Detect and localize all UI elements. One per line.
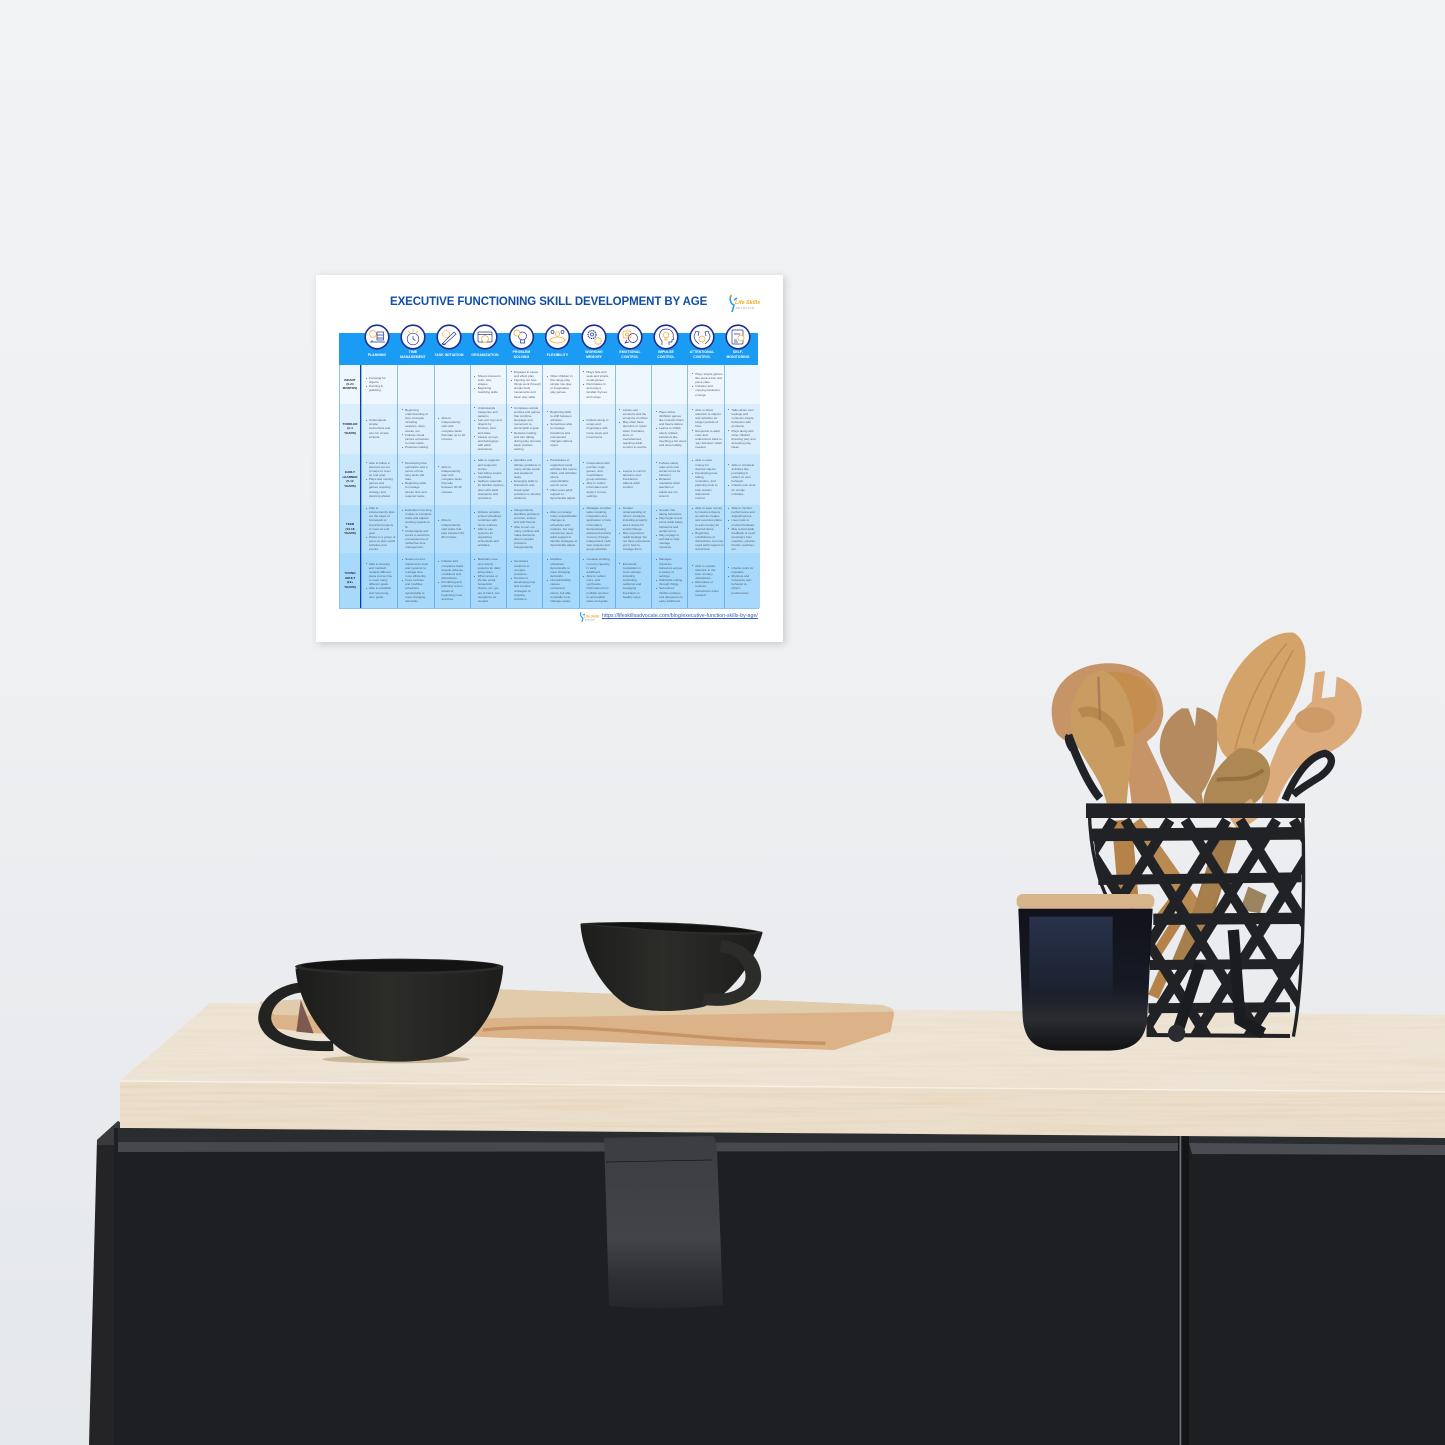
early learner time management: Developing time estimation and a sense of how long tasks will take. bbox=[405, 461, 428, 481]
early learner impulse control: Follows safety rules and most social norms for behavior. bbox=[659, 461, 681, 477]
teen impulse control: May begin to test some adult safety behaviors and social norms. bbox=[659, 516, 683, 533]
poster bbox=[316, 275, 783, 642]
early learner attentional control bbox=[687, 454, 724, 505]
teen impulse control: Greater risk taking behaviors. bbox=[659, 508, 682, 516]
toddler emotional control bbox=[615, 404, 651, 454]
toddler impulse control: Learns to inhibit safety related behaviors like touching a hot stove and street safety. bbox=[659, 426, 686, 447]
column heading: organization: ORGANIZATION bbox=[471, 352, 499, 356]
early learner self monitoring: Able to complete activities like journaling to reflect on own behavior. bbox=[732, 463, 754, 483]
teen problem solving: Independently identifies problems at home, school, and with friends. bbox=[514, 508, 539, 524]
teen attentional control bbox=[687, 505, 724, 552]
young adult working memory bbox=[579, 552, 615, 608]
young adult emotional control bbox=[615, 552, 651, 608]
teen problem solving: Able to sort out many conflicts and make decisions about complex problems independently. bbox=[514, 525, 539, 549]
row label: teen: (13-18 bbox=[346, 527, 354, 531]
toddler impulse control: Plays active inhibition games like musical chairs and freeze dance. bbox=[659, 410, 684, 426]
row label: early learner: LEARNER bbox=[343, 475, 357, 479]
skill icons row bbox=[364, 324, 751, 350]
row label: young adult: (19+ bbox=[347, 580, 353, 584]
young adult task initiation: Prioritizing and planning occurs ahead of beginning most activities. bbox=[441, 580, 463, 601]
footer logo: ADVOCATE bbox=[585, 618, 596, 622]
toddler task initiation: Able to independently start and complete tasks that take up to 10 minutes. bbox=[441, 416, 465, 441]
row label: toddler: (2-4 bbox=[347, 426, 353, 430]
toddler working memory bbox=[579, 404, 615, 454]
young adult planning bbox=[361, 552, 397, 608]
teen organization bbox=[470, 505, 506, 552]
young adult planning: Able to establish and meet long-term goals. bbox=[369, 586, 391, 599]
teen time management: Understands and works to avoid the consequences of ineffective time management. bbox=[405, 529, 430, 549]
column heading: time management bbox=[400, 350, 426, 359]
column heading: problem solving: PROBLEM bbox=[513, 350, 530, 354]
column heading: emotional control: EMOTIONAL bbox=[619, 350, 641, 354]
infant problem solving bbox=[506, 365, 542, 404]
early learner problem solving bbox=[506, 454, 542, 505]
teen problem solving bbox=[506, 505, 542, 552]
young adult time management: Uses routines and modifies schedules dynamically to meet changing demands. bbox=[405, 578, 425, 603]
icon: impulse control bbox=[654, 325, 678, 349]
column heading: impulse control bbox=[657, 350, 675, 359]
infant problem solving: Engages in cause and effect play. bbox=[514, 370, 538, 378]
row label: teen bbox=[339, 505, 361, 552]
toddler problem solving bbox=[506, 404, 542, 454]
row label: early learner: (5-12 bbox=[346, 479, 354, 483]
early learner organization: Able to organize and sequence stories. bbox=[478, 458, 500, 471]
infant working memory: Participates in and enjoys familiar rhymes and songs. bbox=[586, 382, 607, 399]
right black cup bbox=[580, 922, 763, 1011]
young adult impulse control: Withholds cutting through things. bbox=[659, 578, 682, 586]
toddler time management: Follows visual picture schedules to order tasks. bbox=[405, 433, 429, 445]
row label: infant: INFANT bbox=[344, 378, 356, 382]
young adult time management bbox=[397, 552, 434, 608]
young adult emotional control: Emotional modulation in most settings, including controlling outbursts and managing frustration in healthy ways. bbox=[623, 562, 642, 599]
teen working memory: Manages complex tasks requiring integration and application of new information, demonstrating advanced working memory through independent multi step projects and group activities. bbox=[586, 506, 611, 551]
toddler organization: Can sort toys and objects by function, form, and class. bbox=[478, 418, 502, 435]
icon: self monitoring bbox=[726, 325, 750, 349]
column heading: attentional control: ATTENTIONAL bbox=[690, 350, 714, 354]
young adult impulse control bbox=[651, 552, 687, 608]
teen attentional control: Beginning mindfulness of distractions, but may need adult support to avoid them. bbox=[695, 531, 724, 551]
young adult task initiation bbox=[434, 552, 470, 608]
teen attentional control: Able to save money for desired objects as well as creates and executes plans to earn money for desired items. bbox=[695, 506, 722, 531]
toddler planning bbox=[361, 404, 397, 454]
teen time management bbox=[397, 505, 434, 552]
left black cup bbox=[265, 959, 503, 1063]
toddler planning: Understands simple instructions and can run simple errands. bbox=[369, 418, 390, 439]
early learner attentional control: Able to save money for desired objects. bbox=[695, 458, 717, 471]
young adult time management: Seeks out and implements tools and systems to manage time more efficiently. bbox=[405, 557, 428, 578]
toddler problem solving: Decision making and turn taking during play promote basic problem solving. bbox=[514, 431, 541, 451]
young adult organization: Maintains neat and orderly systems for daily living tasks. bbox=[478, 557, 500, 574]
early learner emotional control: Learns to control tantrums and frustrations without adult comfort. bbox=[623, 469, 645, 489]
column heading: flexibility: FLEXIBILITY bbox=[547, 352, 568, 356]
row label: teen: TEEN bbox=[346, 522, 354, 526]
young adult organization bbox=[470, 552, 506, 608]
infant organization: Beginning matching skills. bbox=[478, 386, 498, 394]
row label: early learner: YEARS) bbox=[344, 484, 356, 488]
cabinet bbox=[89, 1121, 1445, 1445]
toddler time management: Beginning understanding of time concepts including seasons, days, weeks, etc. bbox=[405, 408, 428, 432]
young adult flexibility bbox=[542, 552, 579, 608]
teen flexibility: Able to manage many unpredictable changes to schedules and routines, but may sometimes need adult support to identify strategies to dynamically adjust. bbox=[550, 510, 577, 547]
young adult planning: Able to develop and maintain multiple different plans at one time to meet many different goals. bbox=[369, 562, 392, 586]
teen planning bbox=[361, 505, 397, 552]
column heading: self monitoring: SELF- bbox=[733, 350, 743, 354]
early learner flexibility bbox=[542, 454, 579, 505]
early learner organization: Gathers materials for familiar routines, often with adult assistance and reminders. bbox=[478, 479, 504, 500]
row label: toddler: TODDLER bbox=[343, 422, 357, 426]
column heading: problem solving: SOLVING bbox=[514, 355, 529, 359]
toddler working memory: Follows along to songs and fingerplays with many steps and movements. bbox=[586, 418, 609, 439]
infant working memory: Plays hide and seek and simple recall games. bbox=[586, 370, 609, 382]
early learner time management: Beginning skills to manage leisure time and required tasks. bbox=[405, 481, 427, 498]
toddler emotional control: May often have tantrums or upset when frustrated, tired, or overwhelmed, requiring adult comfort to soothe. bbox=[623, 420, 647, 449]
column heading: time management: TIME bbox=[409, 350, 417, 354]
woven black basket bbox=[1016, 734, 1336, 1051]
column heading: emotional control: CONTROL bbox=[621, 355, 639, 359]
young adult task initiation: Initiates and completes tasks despite adverse conditions and distractions. bbox=[441, 559, 463, 580]
toddler flexibility: Beginning skills to shift between activities. bbox=[550, 410, 572, 422]
toddler organization: Understands categories and patterns. bbox=[478, 406, 498, 418]
icon: task initiation bbox=[437, 325, 461, 349]
teen self monitoring bbox=[724, 505, 760, 552]
footer logo bbox=[580, 612, 600, 622]
dark glass jar with cork lid bbox=[1017, 894, 1154, 1051]
young adult impulse control: Manages impulsive behaviors across a variety of settings. bbox=[659, 557, 682, 578]
young adult self monitoring: Monitors and compares own behavior to others' performance. bbox=[732, 574, 751, 595]
row label: toddler bbox=[339, 404, 361, 454]
young adult problem solving: Generates solutions to complex problems. bbox=[514, 559, 529, 576]
young adult organization: When areas of life like email, household chores, etc. get out of hand, can reorganize as needed. bbox=[478, 574, 500, 603]
row label: early learner bbox=[339, 454, 361, 505]
row label: infant: (0-24 bbox=[346, 382, 354, 386]
row label: early learner: EARLY bbox=[345, 470, 355, 474]
footer link: https://lifeskillsadvocate.com/blog/executive-function-skills-by-age/ bbox=[602, 613, 758, 619]
teen task initiation bbox=[434, 505, 470, 552]
young adult impulse control: Sometimes inhibits reckless and dangerous in early adulthood. bbox=[659, 586, 683, 603]
early learner attentional control: Developing note taking, reminders, and planning tools to help sustain attentional control. bbox=[695, 471, 717, 500]
logo: Life Skills Advocate: ADVOCATE bbox=[736, 306, 754, 310]
toddler organization bbox=[470, 404, 506, 454]
early learner working memory: Independent with puzzles, logic games, and coordinated group activities. bbox=[586, 461, 610, 481]
column heading: attentional control: CONTROL bbox=[693, 355, 711, 359]
row label: teen: YEARS) bbox=[344, 531, 356, 535]
early learner organization: Can follow simple checklists. bbox=[478, 471, 502, 479]
infant planning bbox=[361, 365, 397, 404]
toddler emotional control: Labels own emotions and the emotions of others. bbox=[623, 408, 649, 420]
early learner emotional control bbox=[615, 454, 651, 505]
teen working memory bbox=[579, 505, 615, 552]
teen organization: Able to use systems for organizing schoolwork and activities. bbox=[478, 527, 499, 547]
young adult self monitoring bbox=[724, 552, 760, 608]
early learner planning bbox=[361, 454, 397, 505]
teen flexibility bbox=[542, 505, 579, 552]
row label: young adult: YOUNG bbox=[344, 571, 356, 575]
early learner problem solving: Identifies and defines problems to many simple social and academic tasks. bbox=[514, 458, 541, 479]
infant flexibility bbox=[542, 365, 579, 404]
young adult flexibility: Unpredictability causes occasional stress, but able to handle most changes easily. bbox=[550, 578, 571, 603]
row label: young adult: ADULT bbox=[345, 576, 355, 580]
toddler self monitoring: Talks about own feelings and connects simple behaviors with emotions. bbox=[732, 408, 753, 428]
icon: planning bbox=[365, 325, 389, 349]
young adult problem solving: Persists in developing new and creative strategies to ongoing problems. bbox=[514, 576, 535, 601]
header band bbox=[339, 333, 758, 366]
icon: emotional control bbox=[618, 325, 642, 349]
early learner task initiation bbox=[434, 454, 470, 505]
counter top bbox=[120, 1003, 1445, 1139]
infant planning: Pointing & grabbing. bbox=[369, 384, 383, 392]
infant attentional control: Plays simple games like peek-a-boo and pat-a-cake. bbox=[695, 372, 722, 384]
footer logo: Life Skills bbox=[584, 614, 600, 618]
photo scene: wall, counter, cups, utensils and cabinet bbox=[0, 632, 1445, 1445]
toddler flexibility bbox=[542, 404, 579, 454]
early learner working memory: Able to collect information and apply it to new settings. bbox=[586, 481, 608, 498]
teen emotional control bbox=[615, 505, 651, 552]
row label: young adult: YEARS) bbox=[344, 585, 356, 589]
title: EXECUTIVE FUNCTIONING SKILL DEVELOPMENT BY AGE bbox=[390, 296, 707, 308]
column heading: impulse control: IMPULSE bbox=[658, 350, 674, 354]
column heading: working memory bbox=[585, 350, 603, 359]
young adult working memory: Greatest working memory capacity in early adulthood. bbox=[586, 557, 610, 574]
toddler problem solving: Completes simple puzzles and games that combine language and movement to accomplish a goal. bbox=[514, 406, 540, 430]
column heading: problem solving bbox=[512, 350, 530, 359]
teen task initiation: Able to independently start tasks that take between 60-90 minutes. bbox=[441, 518, 465, 539]
toddler impulse control bbox=[651, 404, 687, 454]
toddler organization: Cleans up toys and belongings with adult assistance. bbox=[478, 435, 498, 451]
teen impulse control: May engage in self talk to help manage impulses. bbox=[659, 533, 679, 549]
column heading: self monitoring: MONITORING bbox=[726, 355, 749, 359]
teen emotional control: May experience 'adult feelings' but not have experience yet in how to manage them. bbox=[623, 531, 650, 551]
early learner planning: Able to follow a planned out set of steps to meet an end goal. bbox=[369, 461, 391, 477]
logo: Life Skills Advocate bbox=[729, 294, 760, 312]
column heading: working memory: WORKING bbox=[585, 350, 603, 354]
toddler task initiation bbox=[434, 404, 470, 454]
column heading: impulse control: CONTROL bbox=[657, 355, 675, 359]
early learner planning: Plays fast moving games and games requiring strategy and planning ahead. bbox=[369, 477, 393, 498]
infant planning: Focusing for objects. bbox=[369, 376, 386, 384]
young adult flexibility: Modifies schedules dynamically to meet changing demands. bbox=[550, 557, 570, 578]
column heading: attentional control bbox=[690, 350, 714, 359]
skills by age table bbox=[339, 365, 759, 609]
early learner impulse control: Behavior maintains when teachers or adults are not around. bbox=[659, 477, 680, 498]
teen planning: Works in a group of peers to plan social activities and events. bbox=[369, 535, 395, 551]
toddler flexibility: Sometimes able to manage transitions and unexpected changes without upset. bbox=[550, 422, 572, 447]
icon: flexibility bbox=[546, 325, 569, 349]
infant working memory bbox=[579, 365, 615, 404]
teen impulse control bbox=[651, 505, 687, 552]
icon: problem solving bbox=[510, 325, 533, 349]
toddler attentional control: Responds to adult cues and redirections back to 'pay attention' when needed. bbox=[695, 428, 722, 449]
row label: infant: MONTHS) bbox=[343, 386, 357, 390]
row label: toddler: YEARS) bbox=[344, 431, 356, 435]
icon: attentional control bbox=[690, 325, 714, 349]
toddler self monitoring: Plays along with other children, directing play and accepting play ideas. bbox=[732, 428, 755, 449]
column heading: self monitoring bbox=[726, 350, 750, 359]
infant organization bbox=[470, 365, 506, 404]
early learner impulse control bbox=[651, 454, 687, 505]
wooden utensils bbox=[1052, 633, 1362, 997]
young adult attentional control: Eliminates or reduces distractions when needed. bbox=[695, 580, 719, 597]
teen self monitoring: Uses tools to monitor behavior. bbox=[732, 518, 755, 527]
toddler time management: Practices waiting. bbox=[405, 445, 429, 449]
toddler attentional control: Able to direct attention to objects and activities for longer periods of time. bbox=[695, 408, 721, 428]
early learner task initiation: Able to independently start and complete tasks that take between 30-60 minutes. bbox=[441, 465, 462, 494]
toddler attentional control bbox=[687, 404, 724, 454]
teen organization: Follows complex school schedules combines with home routines. bbox=[478, 510, 501, 527]
young adult problem solving bbox=[506, 552, 542, 608]
cutting board bbox=[260, 989, 894, 1050]
icon: organization bbox=[473, 325, 497, 349]
logo: Life Skills Advocate: Life Skills bbox=[735, 300, 760, 306]
toddler time management bbox=[397, 404, 434, 454]
icon: time management bbox=[401, 325, 425, 349]
teen planning: Able to independently plan out the steps of homework or important projects to meet an end goal. bbox=[369, 506, 394, 535]
early learner working memory bbox=[579, 454, 615, 505]
young adult self monitoring: Checks work for mistakes. bbox=[732, 566, 753, 574]
young adult attentional control: Able to sustain attention in the face of many distractions. bbox=[695, 564, 715, 580]
infant problem solving: Figuring out how things work through simple body movements and basic play skills. bbox=[514, 378, 541, 399]
icon: working memory bbox=[582, 325, 606, 349]
row label: infant bbox=[339, 365, 361, 404]
infant organization: Shows interest in color, size, shapes. bbox=[478, 374, 501, 386]
row label: young adult bbox=[339, 552, 361, 608]
young adult attentional control bbox=[687, 552, 724, 608]
column heading: working memory: MEMORY bbox=[586, 355, 602, 359]
early learner organization bbox=[470, 454, 506, 505]
early learner flexibility: Participates in organized social activities like sports, clubs, and activities where unpredictable events occur. bbox=[550, 458, 577, 487]
leather strap handle bbox=[604, 1136, 723, 1308]
early learner self monitoring bbox=[724, 454, 760, 505]
early learner time management bbox=[397, 454, 434, 505]
infant attentional control bbox=[687, 365, 724, 404]
early learner problem solving: Emerging skills to brainstorm and break apart problems to identify solutions. bbox=[514, 479, 540, 500]
teen self monitoring: May recruit adult feedback or need reminders from coaches, parents, friends, teachers, etc. bbox=[732, 527, 756, 551]
column heading: emotional control bbox=[619, 350, 641, 359]
infant flexibility: Older children in this range play simple role play or imaginative play games. bbox=[550, 374, 572, 394]
early learner flexibility: Often uses adult support to dynamically adjust. bbox=[550, 488, 576, 500]
young adult working memory: Able to collect, store, and synthesize information from multiple sources to accomplish tasks and goals. bbox=[586, 574, 609, 603]
teen time management: Estimates how long it takes to complete tasks and adjusts working speeds to fit. bbox=[405, 508, 432, 529]
column heading: task initiation: TASK INITIATION bbox=[434, 352, 464, 356]
toddler self monitoring bbox=[724, 404, 760, 454]
early learner self monitoring: Checks own work for simple mistakes. bbox=[732, 483, 755, 496]
teen self monitoring: Able to monitor performance and adjust/improve. bbox=[732, 506, 755, 518]
column heading: planning: PLANNING bbox=[368, 352, 386, 356]
teen emotional control: Greater understanding of others' emotions, including empathy and a desire for social change. bbox=[623, 506, 647, 531]
infant attentional control: Imitation and copying behaviors emerge. bbox=[695, 384, 720, 397]
column heading: time management: MANAGEMENT bbox=[400, 355, 426, 359]
